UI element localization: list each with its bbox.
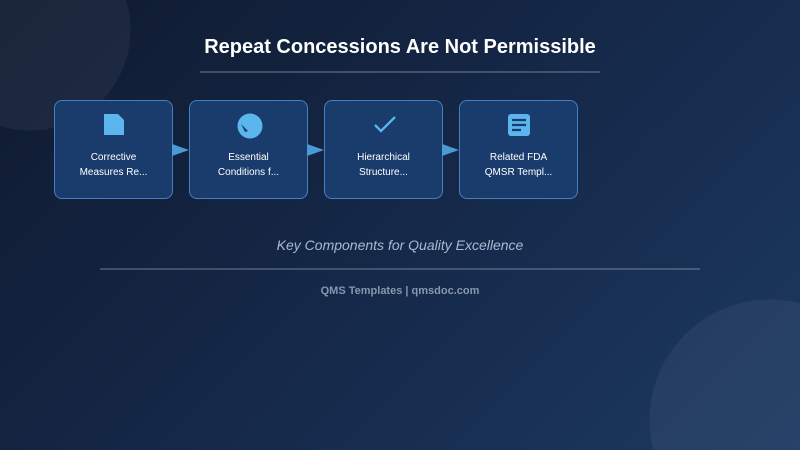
- icon: circle: [238, 114, 262, 138]
- label 3: [357, 152, 410, 178]
- label 4: Related FDA: [490, 152, 547, 163]
- label 2: Conditions f...: [218, 167, 279, 178]
- footer: QMS Templates | qmsdoc.com: [321, 285, 479, 297]
- arrow 2: [307, 144, 324, 156]
- label 3: Structure...: [359, 167, 408, 178]
- label 2: [218, 152, 279, 178]
- icon: check: [374, 116, 396, 132]
- panel: step 4: [459, 100, 578, 199]
- label 1: Corrective: [91, 152, 136, 163]
- label 1: Measures Re...: [80, 167, 147, 178]
- subtitle: Key Components for Quality Excellence: [277, 237, 523, 253]
- arrow 1: [172, 144, 189, 156]
- label 4: [485, 152, 552, 178]
- label 3: Hierarchical: [357, 152, 410, 163]
- panel: step 3: [324, 100, 443, 199]
- title: Repeat Concessions Are Not Permissible: [204, 36, 596, 58]
- panel: step 2: [189, 100, 308, 199]
- arrow 3: [442, 144, 459, 156]
- panel: step 1: [54, 100, 173, 199]
- label 4: QMSR Templ...: [485, 167, 552, 178]
- label 2: Essential: [228, 152, 269, 163]
- label 1: [80, 152, 147, 178]
- icon: list doc: [508, 114, 530, 136]
- icon: document: [104, 114, 124, 135]
